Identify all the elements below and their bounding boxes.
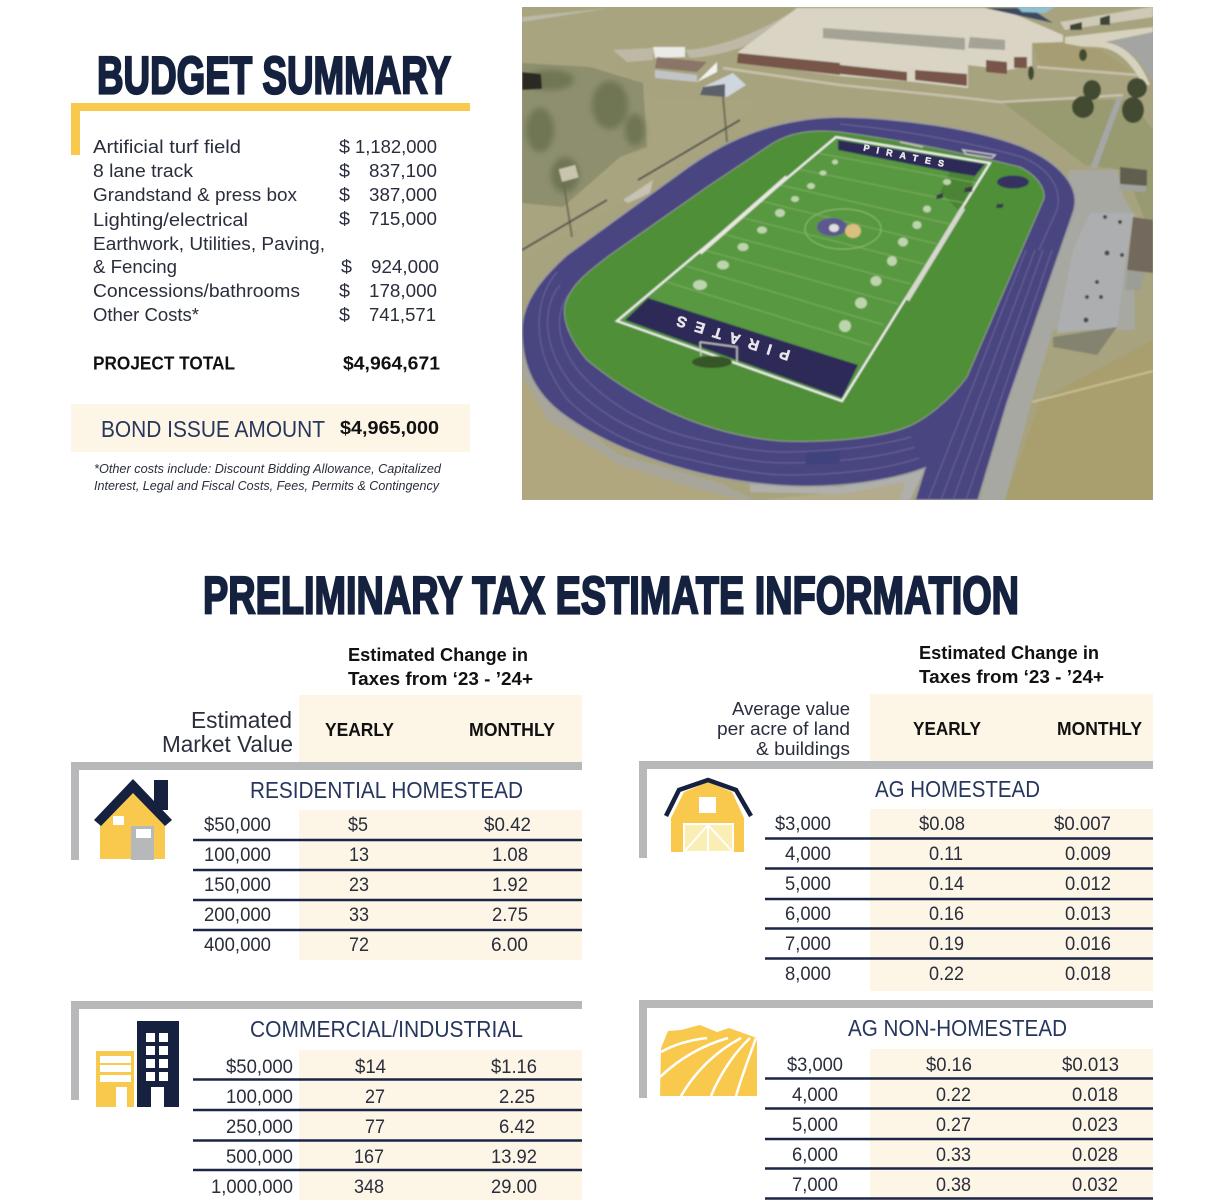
panel: agricultural header: Taxes from ‘23 - ’24+ [919,666,1104,687]
table rows: commercial/industrial: 13.92 [491,1147,537,1168]
table rows: ag homestead: 7,000 [785,934,831,955]
table rows: ag homestead: 4,000 [785,844,831,865]
table rows: ag homestead: 0.013 [1065,904,1111,925]
table rows: ag homestead: 6,000 [785,904,831,925]
sidelines [617,137,990,401]
budget line items: $ [341,256,352,277]
icon: farm field [660,1025,757,1096]
table rows: ag non-homestead: 0.22 [936,1085,971,1106]
table rows: ag homestead: $0.007 [1054,814,1111,835]
budget line items: Lighting/electrical [93,209,248,230]
end zone lettering [675,143,945,363]
icon: buildings [96,1021,179,1107]
table rows: residential homestead: $5 [348,815,368,836]
table rows: ag non-homestead: 7,000 [792,1175,838,1196]
table rows: ag non-homestead: 0.018 [1072,1085,1118,1106]
budget line items: Grandstand & press box [93,184,298,205]
panel: agricultural header [717,642,1153,762]
budget line items: 924,000 [371,256,439,277]
table rows: ag homestead: 0.14 [929,874,964,895]
table rows: commercial/industrial: 167 [354,1147,384,1168]
table rows: commercial/industrial: 250,000 [226,1117,293,1138]
panel: agricultural header: per acre of land [717,718,850,739]
panel: ag non-homestead [639,1000,1153,1200]
table rows: ag homestead: 0.018 [1065,964,1111,985]
panel: ag homestead [639,761,1153,991]
lane lines [539,124,1058,500]
table rows: ag non-homestead: 5,000 [792,1115,838,1136]
panel: residential homestead header: MONTHLY [469,719,556,740]
budget line items: $ [339,160,350,181]
budget line items: Artificial turf field [93,136,241,157]
panel: residential homestead header: YEARLY [325,719,395,740]
vegetation [522,63,647,207]
budget line items: $ [339,184,350,205]
project total: PROJECT TOTAL [93,352,235,374]
panel: commercial/industrial [71,1001,582,1200]
goals [692,356,732,368]
table rows: ag homestead: 0.16 [929,904,964,925]
panel: ag homestead: AG HOMESTEAD [875,776,1040,802]
table rows: commercial/industrial: 2.25 [499,1087,535,1108]
project total [93,352,440,374]
table rows: residential homestead: 150,000 [204,875,271,896]
icon: house [94,779,172,860]
budget line items: Other Costs* [93,304,199,325]
running track [522,117,1075,500]
table rows: ag homestead: 0.19 [929,934,964,955]
table rows: ag homestead: 8,000 [785,964,831,985]
panel: residential homestead header: Taxes from ‘23 - ’24+ [348,668,533,689]
budget line items: 1,182,000 [355,136,437,157]
trees [1028,49,1147,123]
panel: residential homestead [71,762,582,960]
table rows: ag homestead: 0.22 [929,964,964,985]
table rows: residential homestead: 33 [349,905,369,926]
panel: agricultural header: YEARLY [913,718,982,739]
table rows: commercial/industrial: 100,000 [226,1087,293,1108]
panel: residential homestead header: Estimated Change in [348,644,528,665]
table rows: residential homestead: 23 [349,875,369,896]
callout: bond issue amount: $4,965,000 [340,417,439,438]
table rows: ag homestead: $3,000 [775,814,831,835]
heading: budget summary: BUDGET SUMMARY [97,46,451,106]
table rows: ag homestead: 0.016 [1065,934,1111,955]
budget line items: 837,100 [369,160,437,181]
walkway and concrete apron [1090,97,1123,168]
center logo [805,209,881,249]
budget line items: 178,000 [369,280,437,301]
budget line items [93,136,439,325]
table rows: ag homestead: $0.08 [919,814,965,835]
panel: agricultural header: Average value [732,698,850,719]
table rows: residential homestead [193,815,582,956]
panel: agricultural header: MONTHLY [1057,718,1143,739]
panel: ag non-homestead: AG NON-HOMESTEAD [848,1015,1067,1041]
table rows: residential homestead: $0.42 [484,815,531,836]
table rows: residential homestead: 6.00 [491,935,528,956]
turf infield [564,131,1044,441]
table rows: residential homestead: $50,000 [204,815,271,836]
budget line items: $ [339,280,350,301]
budget line items: $ [339,304,350,325]
panel: residential homestead header: Market Value [162,731,293,757]
footnote [94,462,442,493]
table rows: commercial/industrial: $14 [355,1057,386,1078]
table rows: commercial/industrial: 77 [365,1117,385,1138]
budget line items: Concessions/bathrooms [93,280,300,301]
end zones [838,140,985,176]
panel: agricultural header: & buildings [756,738,850,759]
table rows: ag non-homestead: 0.27 [936,1115,971,1136]
budget line items: $ [339,136,350,157]
yard numbers [693,160,951,332]
panel: residential homestead header [162,644,582,763]
table rows: residential homestead: 100,000 [204,845,271,866]
budget line items: Earthwork, Utilities, Paving, [93,233,325,254]
table rows: ag non-homestead [765,1055,1153,1198]
budget line items: 8 lane track [93,160,194,181]
end zone lettering: PIRATES [675,312,792,363]
budget line items: 715,000 [369,208,437,229]
yellow corner bracket [71,103,470,155]
table rows: commercial/industrial [193,1057,582,1198]
aerial illustration of stadium [520,5,1156,502]
footnote: Interest, Legal and Fiscal Costs, Fees, Permits & Contingency [94,479,440,493]
table rows: ag non-homestead: 4,000 [792,1085,838,1106]
table rows: commercial/industrial: 29.00 [491,1177,537,1198]
table rows: ag non-homestead: $0.16 [926,1055,972,1076]
field surroundings [522,7,800,260]
panel: residential homestead: RESIDENTIAL HOMESTEAD [250,777,523,803]
end zone lettering: PIRATES [863,143,945,169]
table rows: commercial/industrial: 348 [354,1177,384,1198]
outbuildings [653,47,685,58]
table rows: residential homestead: 2.75 [492,905,528,926]
table rows: residential homestead: 72 [349,935,369,956]
table rows: ag non-homestead: 0.023 [1072,1115,1118,1136]
table rows: residential homestead: 200,000 [204,905,271,926]
table rows: ag homestead: 0.009 [1065,844,1111,865]
panel: agricultural header: Estimated Change in [919,642,1099,663]
table rows: ag non-homestead: 6,000 [792,1145,838,1166]
table rows: commercial/industrial: 500,000 [226,1147,293,1168]
icon: barn [666,780,751,852]
footnote: *Other costs include: Discount Bidding Allowance, Capitalized [94,462,442,476]
table rows: residential homestead: 1.08 [492,845,528,866]
grandstand [1057,213,1135,333]
panel: residential homestead header: Estimated [191,707,292,733]
table rows: ag non-homestead: 0.028 [1072,1145,1118,1166]
disc [997,176,1029,188]
table rows: commercial/industrial: 1,000,000 [211,1177,293,1198]
table rows: ag homestead: 0.012 [1065,874,1111,895]
table rows: ag homestead: 0.11 [929,844,963,865]
table rows: ag non-homestead: 0.33 [936,1145,971,1166]
table rows: residential homestead: 400,000 [204,935,271,956]
budget line items: & Fencing [93,256,177,277]
callout: bond issue amount [71,404,470,452]
table rows: residential homestead: 1.92 [492,875,528,896]
callout: bond issue amount: BOND ISSUE AMOUNT [101,416,325,442]
table rows: ag non-homestead: 0.032 [1072,1175,1118,1196]
light poles and fences [562,97,727,237]
table rows: ag homestead [765,814,1153,985]
table rows: ag non-homestead: 0.38 [936,1175,971,1196]
school building [738,8,1063,88]
table rows: ag non-homestead: $0.013 [1062,1055,1119,1076]
budget line items: $ [339,208,350,229]
panel: commercial/industrial: COMMERCIAL/INDUSTRIAL [250,1016,523,1042]
table rows: commercial/industrial: $1.16 [491,1057,537,1078]
project total: $4,964,671 [343,352,440,374]
table rows: residential homestead: 13 [349,845,369,866]
table rows: ag homestead: 5,000 [785,874,831,895]
table rows: ag non-homestead: $3,000 [787,1055,843,1076]
table rows: commercial/industrial: 6.42 [499,1117,535,1138]
school pavement [614,14,788,62]
budget line items: 741,571 [369,304,436,325]
table rows: commercial/industrial: $50,000 [226,1057,293,1078]
football field [622,140,986,383]
budget line items: 387,000 [369,184,437,205]
table rows: commercial/industrial: 27 [365,1087,385,1108]
